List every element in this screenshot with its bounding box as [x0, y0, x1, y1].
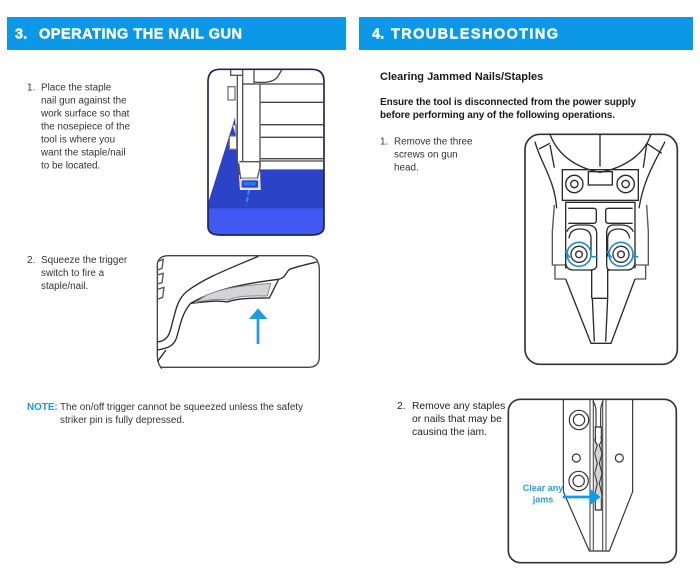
warning text: disconnect power	[380, 97, 636, 121]
subheading: clearing jammed nails: Clearing Jammed Nails/Staples	[380, 71, 543, 83]
step 1 text: place the nail gun: the nosepiece of the	[41, 122, 130, 132]
step 2 text: squeeze the trigger: staple/nail.	[41, 281, 88, 292]
note: safety striker pin: striker pin is fully depressed.	[60, 415, 185, 426]
step 2 text: squeeze the trigger: switch to fire a	[41, 268, 105, 279]
step 1 text: place the nail gun: nail gun against the	[41, 96, 127, 106]
note: safety striker pin: The on/off trigger cannot be squeezed unless the safety	[60, 402, 303, 413]
callout: clear any jams	[523, 483, 563, 504]
step 1 text: place the nail gun: to be located.	[41, 160, 100, 172]
section header: operating the nail gun: 3.	[15, 26, 27, 42]
section header: operating the nail gun: OPERATING THE NAIL GUN	[39, 26, 242, 42]
step 2 text: squeeze the trigger: 2.	[27, 255, 35, 266]
callout: clear any jams: Clear any	[523, 483, 563, 493]
warning text: disconnect power: before performing any of the following operations.	[380, 110, 615, 121]
step 2 text: remove staples: or nails that may be	[412, 414, 502, 425]
step 2 text: remove staples	[397, 401, 505, 438]
step 1 text: place the nail gun: work surface so that	[40, 108, 130, 120]
illustration: trigger squeeze with arrow	[157, 256, 319, 369]
step 1 text: remove the screws: head.	[394, 162, 419, 174]
mask hiding the lower edge of the step 2 text	[405, 436, 505, 442]
illustration: staple channel jam	[508, 399, 676, 563]
step 2 text: remove staples: 2.	[397, 401, 406, 412]
step 1 text: remove the screws: Remove the three	[394, 136, 473, 148]
callout: clear any jams: jams	[532, 494, 553, 504]
step 1 text: remove the screws: screws on gun	[394, 150, 458, 160]
section header: operating the nail gun	[7, 17, 346, 50]
step 2 text: squeeze the trigger	[27, 255, 128, 292]
step 1 text: remove the screws	[380, 136, 473, 174]
step 1 text: place the nail gun: 1.	[27, 82, 35, 94]
note: safety striker pin	[27, 402, 303, 426]
step 2 text: squeeze the trigger: Squeeze the trigger	[41, 255, 128, 266]
step 1 text: place the nail gun: Place the staple	[41, 82, 112, 94]
section header: troubleshooting	[359, 17, 693, 50]
note: safety striker pin: NOTE:	[27, 402, 58, 413]
step 1 text: place the nail gun: want the staple/nail	[40, 148, 126, 158]
step 1 text: remove the screws: 1.	[380, 136, 388, 148]
illustration: gun head with three screws	[525, 134, 677, 364]
warning text: disconnect power: Ensure the tool is disconnected from the power supply	[380, 97, 636, 108]
step 2 text: remove staples: causing the jam.	[412, 427, 487, 438]
step 1 text: place the nail gun: tool is where you	[41, 134, 115, 146]
step 2 text: remove staples: Remove any staples	[412, 401, 505, 412]
illustration: nail gun nose on work surface	[208, 69, 324, 235]
step 1 text: place the nail gun	[27, 82, 130, 172]
section header: troubleshooting: TROUBLESHOOTING	[391, 26, 558, 42]
section header: troubleshooting: 4.	[372, 26, 384, 42]
